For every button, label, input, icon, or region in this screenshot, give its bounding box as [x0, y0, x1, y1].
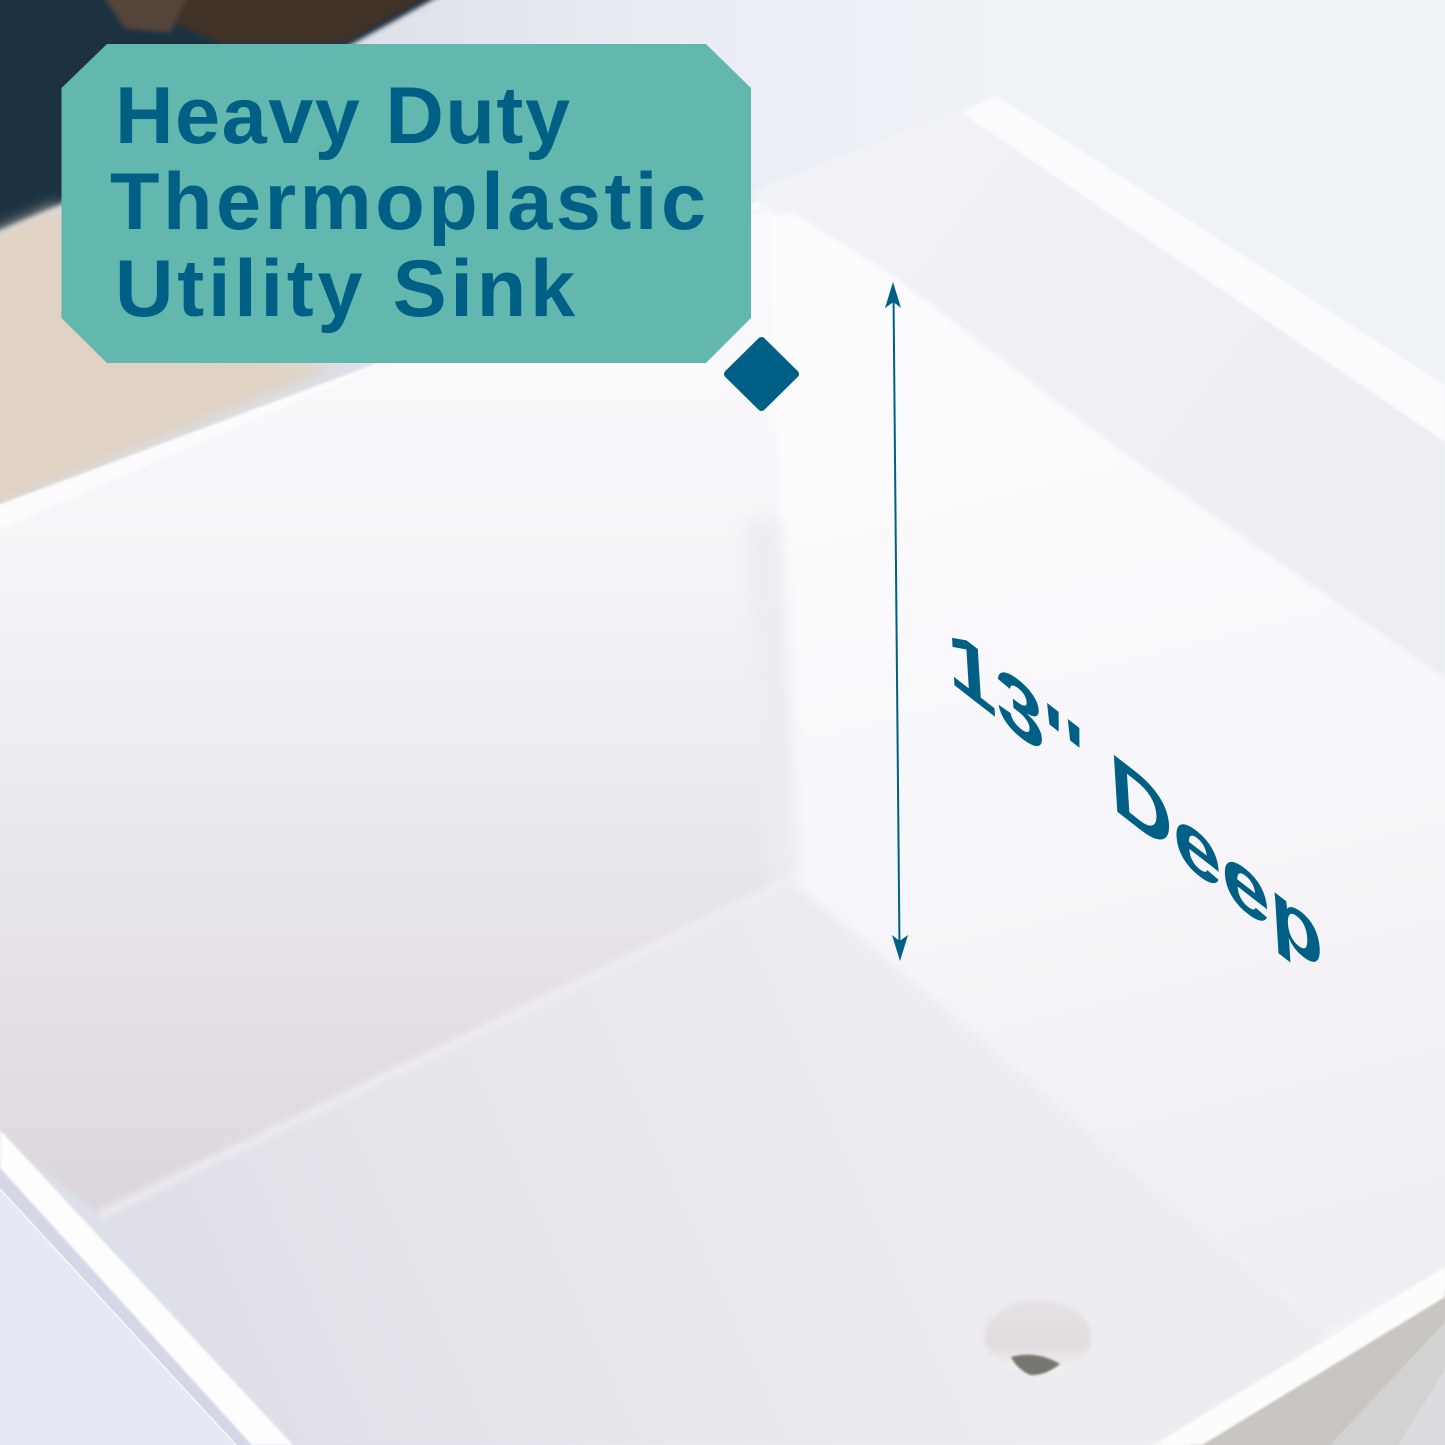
drain opening	[1011, 1355, 1060, 1375]
sink: front right outside lower panel	[1398, 1370, 1445, 1445]
background carpet	[0, 205, 340, 515]
depth label: 13'' Deep	[944, 606, 1326, 991]
sink: front right outside band	[1190, 1290, 1445, 1445]
title: Heavy Duty	[115, 71, 570, 161]
sink: left rim	[0, 200, 760, 534]
sink: front left rim	[0, 1130, 293, 1445]
sink: front right outside panel	[1330, 1322, 1445, 1445]
sink: back ledge	[755, 95, 1445, 690]
title: Thermoplastic	[110, 157, 706, 247]
sink: basin left wall	[0, 205, 790, 1215]
callout diamond	[728, 341, 795, 407]
background dark fabric and wood	[0, 0, 450, 235]
outside panel bottom left	[0, 1168, 252, 1445]
drain	[985, 1300, 1091, 1375]
depth arrow	[885, 282, 908, 961]
sink: front right rim	[1154, 1267, 1445, 1445]
sink: soft corner transition	[745, 520, 800, 880]
sink: floor edge highlight	[100, 880, 1320, 1325]
title badge	[62, 44, 751, 363]
sink: basin right wall	[770, 214, 1445, 1330]
title: Utility Sink	[115, 244, 576, 334]
sink: front left rim shadow	[0, 1165, 252, 1445]
sink: front left panel seam	[0, 1189, 236, 1445]
sink: basin floor	[100, 880, 1320, 1445]
sink: back ledge raised lip	[962, 95, 1445, 442]
